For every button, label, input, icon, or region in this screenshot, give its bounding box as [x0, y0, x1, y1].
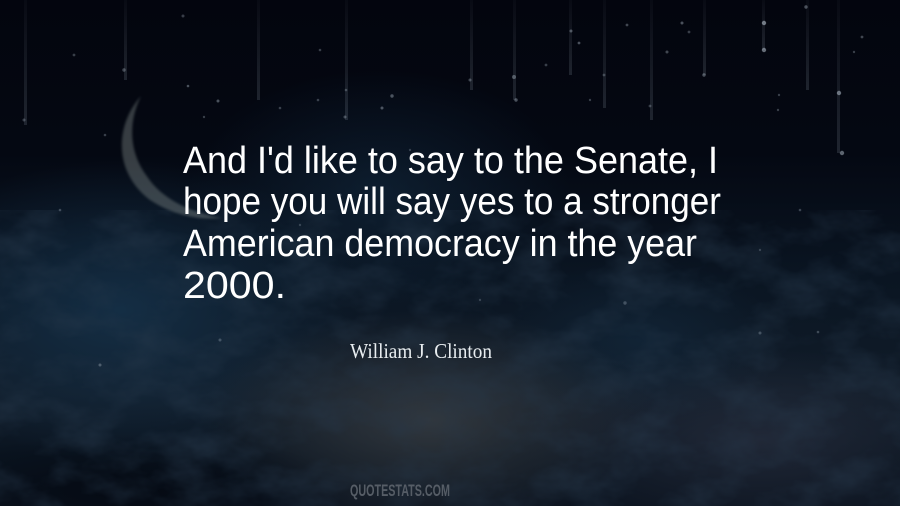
quote text: hope you will say yes to a stronger [183, 181, 721, 223]
quote text: American democracy in the year [183, 223, 697, 265]
quote text [183, 140, 721, 307]
author attribution: William J. Clinton [350, 339, 492, 363]
watermark: QUOTESTATS.COM [350, 481, 450, 500]
quote text: 2000. [183, 265, 286, 307]
quote text: And I'd like to say to the Senate, I [183, 140, 718, 182]
falling stars [22, 0, 863, 366]
icon: crescent moon [122, 96, 222, 219]
